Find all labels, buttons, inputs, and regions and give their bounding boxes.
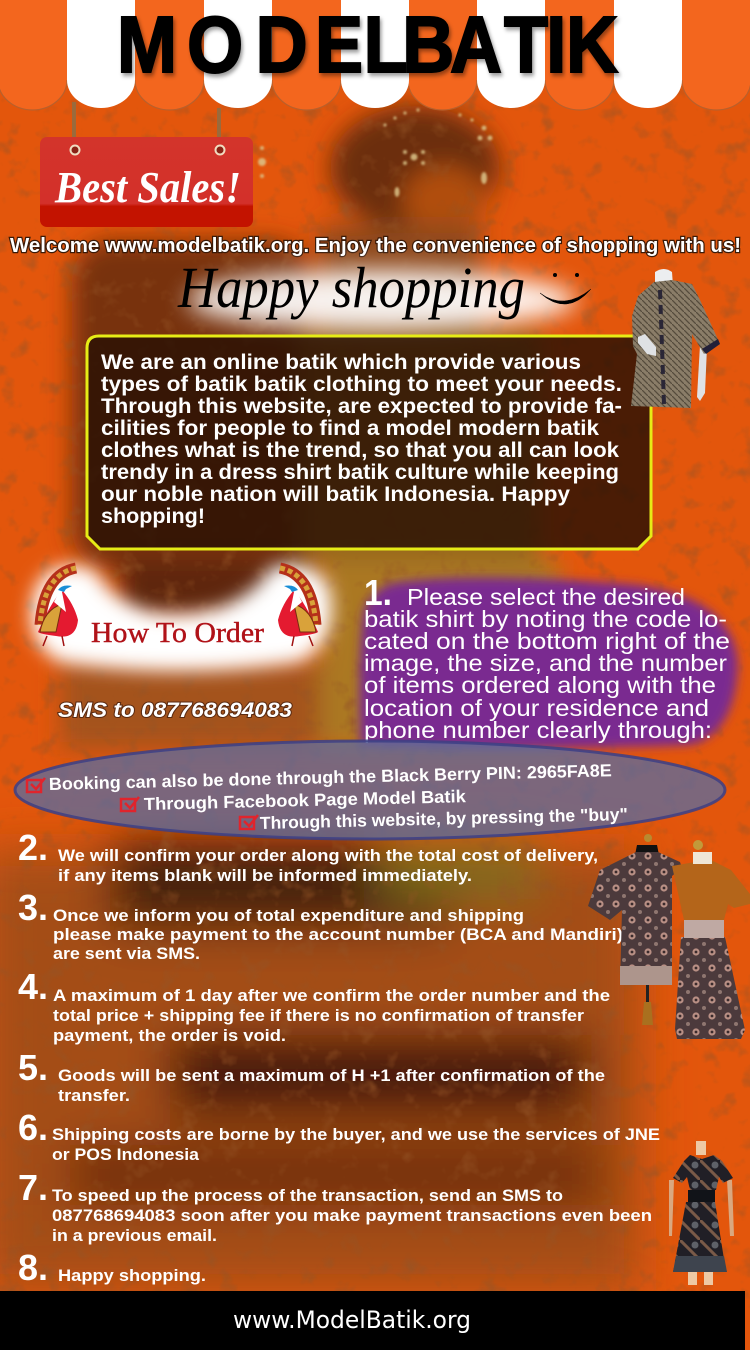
intro panel: cilities for people to find a model modern batik — [101, 417, 599, 440]
step 1 on purple panel: Please select the desired — [407, 584, 685, 610]
step 7 — [18, 1167, 652, 1245]
garment: dress on mannequin — [669, 1141, 734, 1285]
step 1 on purple panel: location of your residence and — [364, 695, 709, 721]
blouse — [672, 860, 750, 920]
step 5 — [18, 1047, 605, 1105]
step 1 on purple panel — [360, 572, 738, 748]
step 1 on purple panel: 1. — [364, 572, 392, 613]
step 4: 4. — [18, 966, 48, 1007]
step 7: To speed up the process of the transaction, send an SMS to — [52, 1187, 563, 1205]
intro panel: trendy in a dress shirt batik culture while keeping — [101, 461, 619, 484]
shirt on stand — [588, 834, 682, 1025]
step 4: payment, the order is void. — [53, 1027, 286, 1045]
footer bar: www.ModelBatik.org — [233, 1306, 471, 1334]
intro panel: our noble nation will batik Indonesia. Happy — [101, 483, 570, 506]
oval panel: booking channels: Through this website, by pressing the "buy" — [260, 804, 628, 833]
step 7: 087768694083 soon after you make payment transactions even been — [52, 1207, 652, 1225]
step 2: 2. — [18, 827, 48, 868]
step 7: 7. — [18, 1167, 48, 1208]
step 8: 8. — [18, 1247, 48, 1288]
step 2: if any items blank will be informed immediately. — [58, 867, 472, 885]
garment: batik shirt on mannequin — [631, 269, 720, 408]
icon: checkbox 3 — [240, 815, 258, 829]
step 2 — [18, 827, 598, 885]
step 1 on purple panel: of items ordered along with the — [364, 672, 716, 698]
garment: couple batik outfits — [588, 834, 750, 1039]
icon: right peacock — [278, 568, 318, 646]
step 8 — [18, 1247, 206, 1288]
footer bar — [0, 1291, 745, 1350]
intro panel: clothes what is the trend, so that you all can look — [101, 439, 619, 462]
step 3: please make payment to the account number (BCA and Mandiri) — [53, 926, 623, 944]
step 8: Happy shopping. — [58, 1267, 206, 1285]
step 5: 5. — [18, 1047, 48, 1088]
oval panel: booking channels: Through Facebook Page Model Batik — [144, 786, 466, 814]
step 4: A maximum of 1 day after we confirm the order number and the — [53, 987, 610, 1005]
fabric motifs: head dots and flowers — [258, 108, 492, 197]
step 4 — [18, 966, 610, 1045]
icon: checkbox 1 — [27, 778, 45, 792]
step 6: 6. — [18, 1107, 48, 1148]
welcome line: Welcome www.modelbatik.org. Enjoy the convenience of shopping with us! — [10, 235, 741, 257]
step 7: in a previous email. — [52, 1227, 217, 1245]
step 3 — [18, 887, 623, 963]
title: MODELBATIK — [117, 1, 618, 90]
step 3: 3. — [18, 887, 48, 928]
intro panel: shopping! — [101, 505, 205, 528]
oval panel: booking channels: Booking can also be done through the Black Berry PIN: 2965FA8E — [49, 760, 612, 794]
step 3: are sent via SMS. — [53, 945, 200, 963]
SMS line: SMS to 087768694083 — [58, 699, 292, 722]
intro panel: We are an online batik which provide various — [101, 351, 581, 374]
step 6: Shipping costs are borne by the buyer, and we use the services of JNE — [52, 1126, 660, 1144]
step 1 on purple panel: image, the size, and the number — [364, 650, 727, 676]
intro panel: Through this website, are expected to provide fa- — [101, 395, 622, 418]
icon: left peacock — [38, 568, 78, 646]
step 1 on purple panel: batik shirt by noting the code lo- — [364, 606, 727, 632]
intro panel — [87, 336, 651, 549]
step 5: transfer. — [58, 1087, 130, 1105]
oval panel: booking channels — [15, 741, 725, 839]
intro panel: types of batik batik clothing to meet your needs. — [101, 373, 622, 396]
step 3: Once we inform you of total expenditure and shipping — [53, 907, 524, 925]
icon: checkbox 2 — [121, 797, 139, 811]
step 1 on purple panel: cated on the bottom right of the — [364, 628, 730, 654]
step 4: total price + shipping fee if there is no confirmation of transfer — [53, 1007, 585, 1025]
step 1 on purple panel: phone number clearly through: — [364, 717, 712, 743]
step 6 — [18, 1107, 660, 1164]
heading: Happy shopping: Happy shopping — [177, 255, 525, 320]
sign: Best Sales — [40, 102, 253, 227]
step 6: or POS Indonesia — [52, 1146, 200, 1164]
how to order badge: How To Order — [91, 618, 265, 649]
skirt — [675, 937, 745, 1039]
how to order badge — [31, 564, 332, 671]
sign: Best Sales: Best Sales! — [54, 163, 241, 212]
step 5: Goods will be sent a maximum of H +1 after confirmation of the — [58, 1067, 605, 1085]
step 2: We will confirm your order along with the total cost of delivery, — [58, 847, 598, 865]
awning — [0, 0, 750, 110]
